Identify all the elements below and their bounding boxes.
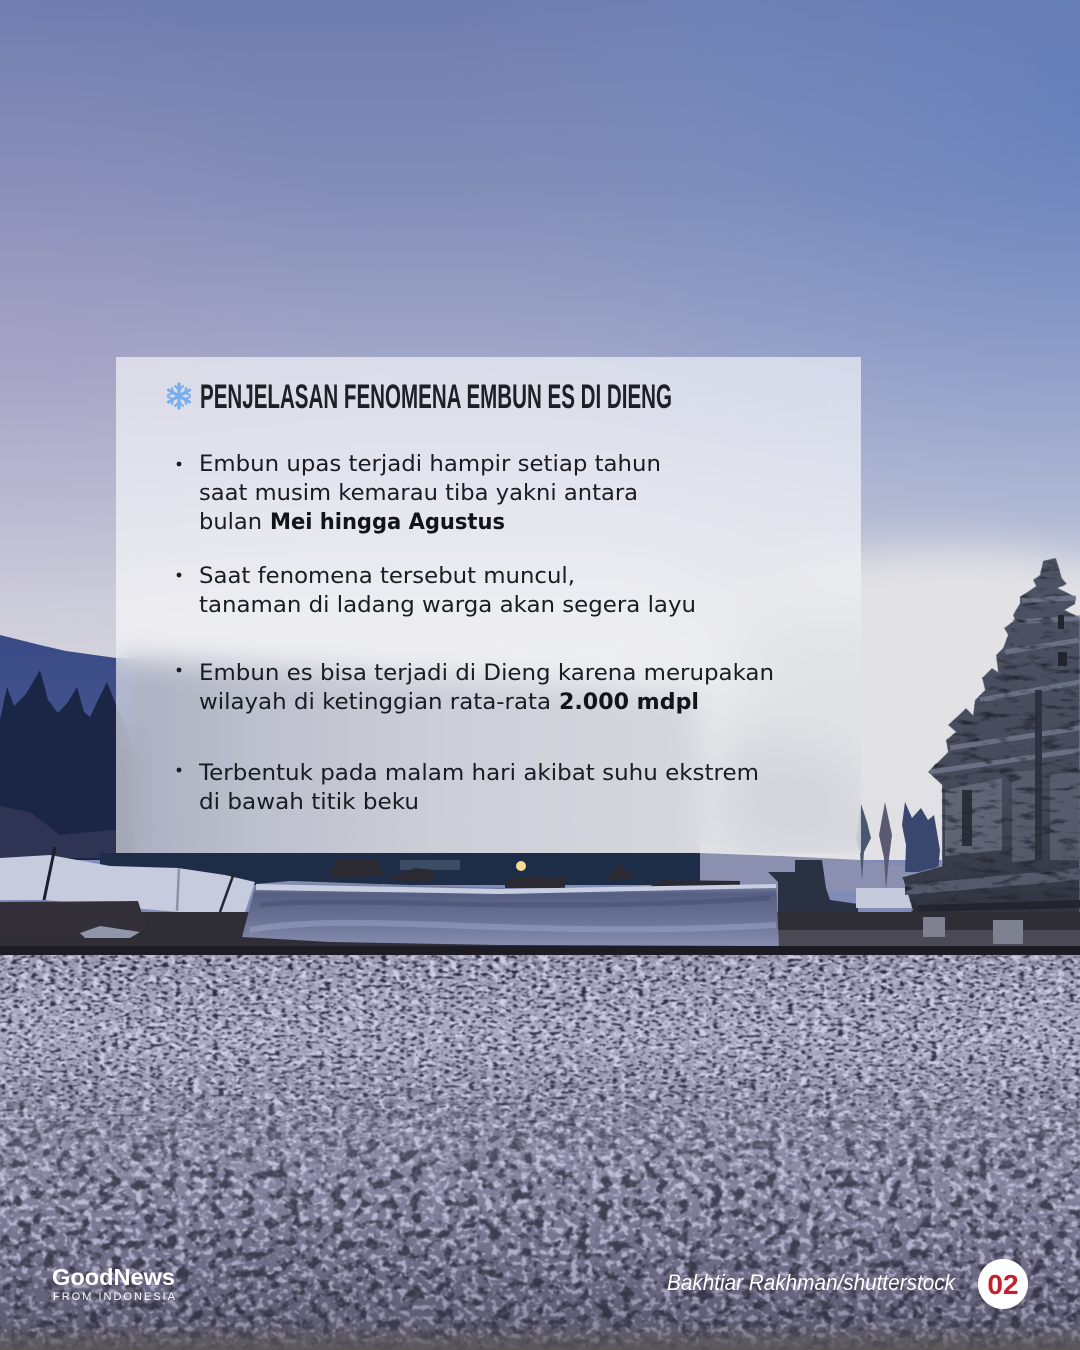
stepped stone structure	[768, 860, 858, 928]
page number badge	[978, 1259, 1028, 1309]
icon: snowflake	[168, 384, 190, 408]
bullet: tanaman layu: Saat fenomena tersebut muncul,	[199, 564, 575, 589]
bullet: ketinggian 2.000 mdpl: 2.000 mdpl	[559, 690, 699, 715]
bullet: Mei hingga Agustus: bulan	[199, 510, 262, 535]
bullet: ketinggian 2.000 mdpl	[177, 661, 774, 715]
right fence	[856, 888, 914, 908]
dark background strip behind the monument	[100, 853, 910, 892]
logo: GoodNews from Indonesia: FROM INDONESIA	[53, 1291, 176, 1303]
stones on top of the monument	[328, 860, 740, 890]
bullet: ketinggian 2.000 mdpl: wilayah di ketinggian rata-rata	[199, 690, 551, 715]
white fence on the left	[0, 847, 255, 912]
bullet: Mei hingga Agustus: saat musim kemarau tiba yakni antara	[199, 481, 638, 506]
logo: GoodNews from Indonesia: GoodNews	[52, 1264, 175, 1290]
dark stone ledge and gravel	[0, 901, 1080, 958]
temple	[895, 558, 1080, 936]
logo: GoodNews from Indonesia	[52, 1264, 176, 1303]
bullet: ketinggian 2.000 mdpl: Embun es bisa terjadi di Dieng karena merupakan	[199, 661, 774, 686]
sky background	[0, 0, 1080, 890]
frost-covered grass field	[0, 955, 1080, 1350]
bullet: Mei hingga Agustus: Mei hingga Agustus	[270, 510, 505, 535]
photo credit: Bakhtiar Rakhman/shutterstock	[667, 1270, 956, 1295]
bullet: tanaman layu	[177, 564, 696, 618]
bullet: Mei hingga Agustus: Embun upas terjadi hampir setiap tahun	[199, 452, 661, 477]
bullet: suhu ekstrem: Terbentuk pada malam hari akibat suhu ekstrem	[198, 761, 759, 786]
tree line on the left	[0, 670, 135, 860]
small cypress trees	[856, 802, 940, 890]
mountain ridge fading behind the panel	[116, 658, 700, 860]
distant mountain on the left	[0, 635, 135, 860]
bullet: tanaman layu: tanaman di ladang warga akan segera layu	[199, 593, 696, 618]
bullet: suhu ekstrem	[177, 761, 759, 815]
bullet: suhu ekstrem: di bawah titik beku	[199, 790, 419, 815]
title: PENJELASAN FENOMENA EMBUN ES DI DIENG	[200, 378, 672, 416]
stone blocks at the temple foot	[923, 917, 1023, 944]
rocks at the foot of the trees	[0, 806, 116, 858]
monument covered by white plastic	[242, 881, 779, 946]
page number badge: 02	[987, 1269, 1019, 1300]
bullet: Mei hingga Agustus	[177, 452, 661, 535]
panel: explanation card	[116, 357, 861, 853]
blurred tree shadows behind the panel	[704, 735, 857, 853]
